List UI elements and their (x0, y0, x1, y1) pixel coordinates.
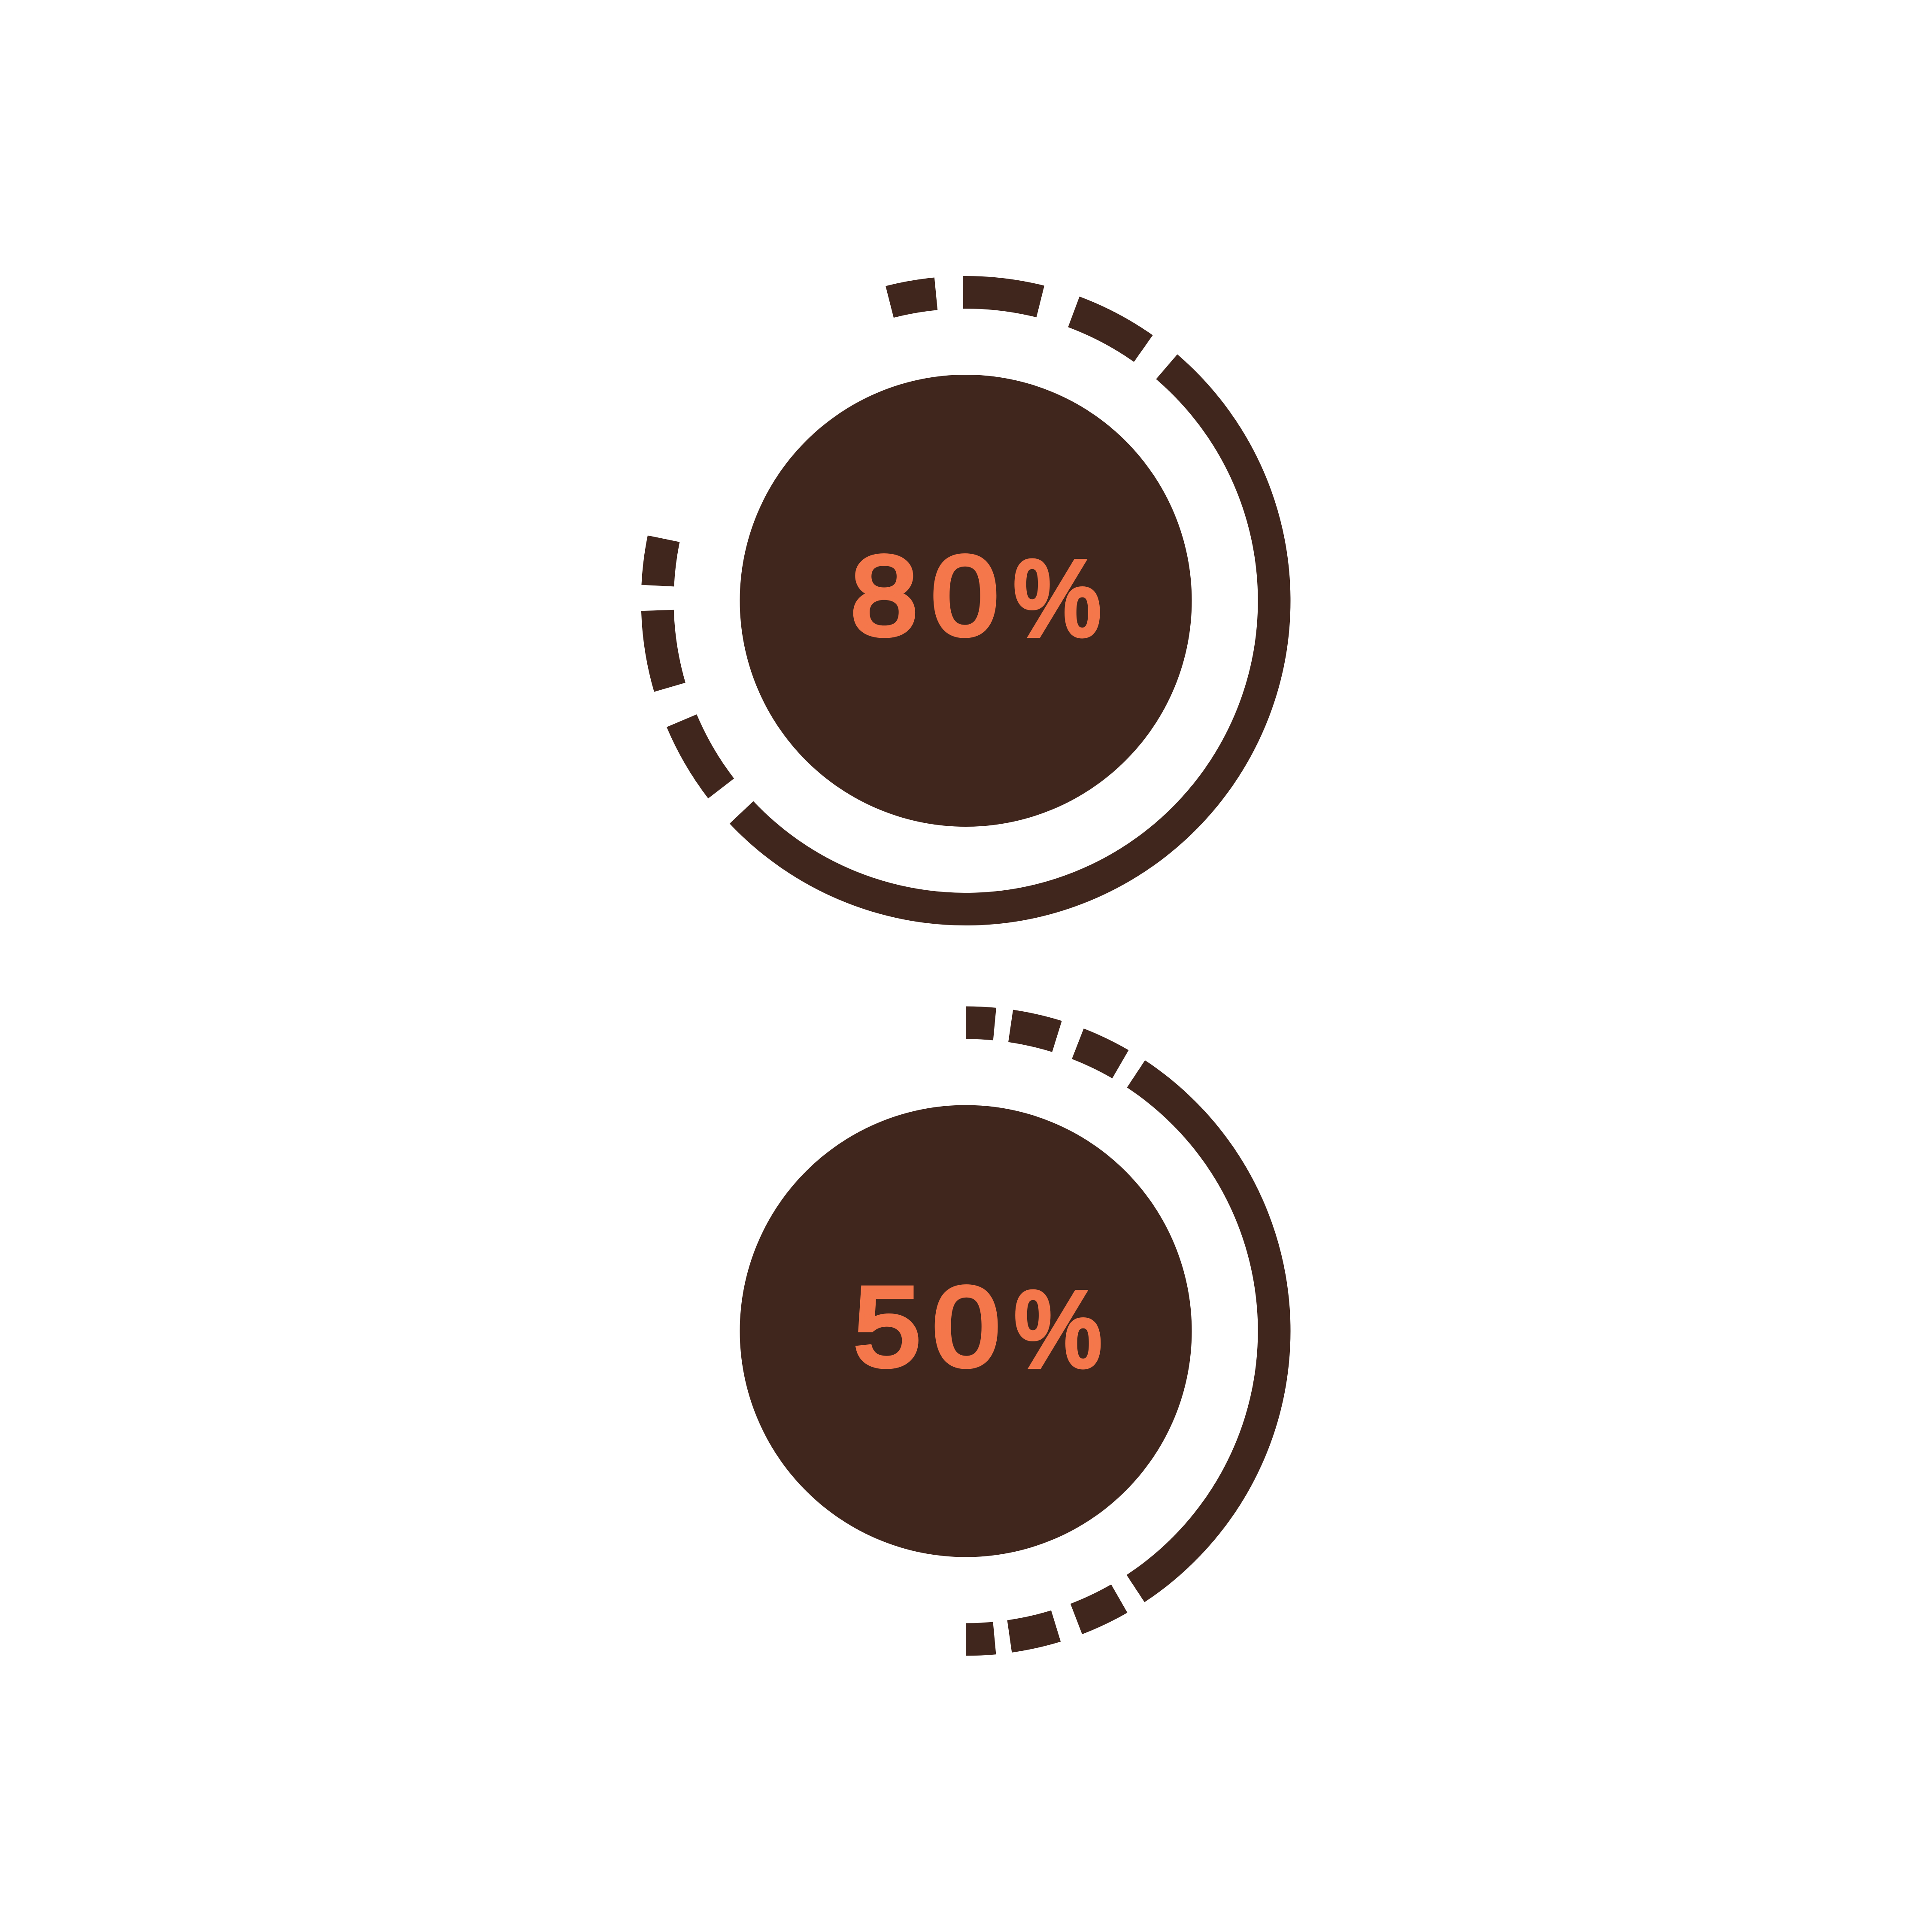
value: 50%: % (1014, 1269, 1102, 1389)
value: 50% (854, 1264, 1102, 1389)
value: 80%: % (1013, 538, 1101, 658)
segmented ring: 50% (609, 974, 1323, 1688)
segmented ring: 80% (655, 289, 1277, 912)
value: 80%: 80 (851, 533, 998, 658)
disc: 80% (740, 375, 1192, 827)
panel: 50% gauge (609, 974, 1323, 1688)
value: 80% (851, 533, 1101, 658)
disc: 50% (740, 1105, 1192, 1557)
value: 50%: 50 (854, 1264, 1000, 1389)
panel: 80% gauge (655, 289, 1277, 912)
